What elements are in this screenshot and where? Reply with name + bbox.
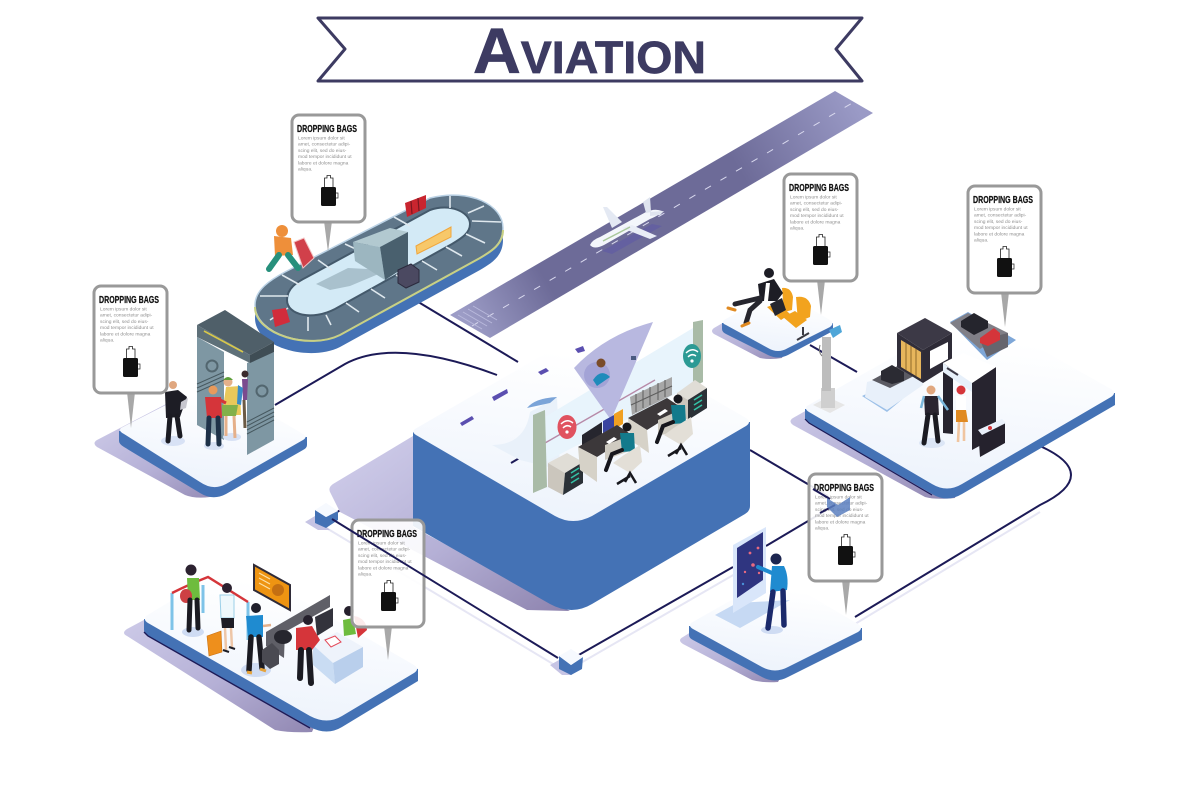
small desk — [978, 419, 1006, 457]
callout: kiosk: amet, consectetur adipi- — [815, 501, 868, 507]
callout: kiosk: Lorem ipsum dolor sit — [815, 494, 862, 500]
callout: security: DROPPING BAGS — [973, 195, 1033, 206]
person: back purple — [242, 370, 248, 428]
person: blue shirt man — [241, 603, 271, 677]
hologram — [574, 322, 653, 420]
platform: seating — [712, 268, 833, 359]
person: red jacket man — [296, 615, 320, 683]
callout: security: labore et dolore magna — [974, 231, 1025, 237]
kiosk screen — [715, 527, 790, 628]
callout: seating — [784, 174, 857, 315]
server right — [677, 380, 707, 420]
wifi icon teal — [683, 344, 701, 368]
wall display — [254, 565, 290, 610]
platform: bottom check-in — [124, 564, 418, 732]
callout: check-in: labore et dolore magna — [358, 565, 409, 571]
icon: suitcase — [813, 234, 830, 265]
platform: left gate — [94, 310, 307, 498]
person: suit — [161, 381, 188, 446]
callout: seating: mod tempor incididunt ut — [790, 213, 844, 219]
callout: conveyor: mod tempor incididunt ut — [298, 154, 352, 160]
person: kiosk user — [758, 554, 788, 634]
bag: red small — [272, 308, 290, 327]
callout: seating: amet, consectetur adipi- — [790, 201, 843, 207]
callout: conveyor: amet, consectetur adipi- — [298, 142, 351, 148]
metal detector — [943, 353, 996, 450]
server left — [548, 453, 583, 495]
title: AVIATION — [473, 15, 706, 87]
callout: conveyor: labore et dolore magna — [298, 160, 349, 166]
person: green top woman — [180, 564, 204, 637]
person: seated man — [728, 268, 786, 326]
connector lines — [275, 300, 1071, 668]
bag: red top — [405, 195, 426, 217]
curved sheet — [492, 397, 560, 470]
callout: security: mod tempor incididunt ut — [974, 225, 1028, 231]
stanchions and rope — [172, 577, 248, 640]
platform: right security — [790, 312, 1115, 499]
x-ray scanner — [897, 318, 952, 383]
callout: security: aliqua. — [974, 238, 988, 244]
icon: suitcase — [123, 346, 140, 377]
icon: suitcase — [838, 534, 855, 565]
bag: dark — [398, 264, 419, 288]
person: white top woman — [220, 583, 235, 652]
camera pole — [813, 325, 845, 413]
callout: kiosk: mod tempor incididunt ut — [815, 513, 869, 519]
icon: suitcase — [321, 176, 338, 206]
callout: conveyor: Lorem ipsum dolor sit — [298, 136, 345, 142]
callout: check-in: mod tempor incididunt ut — [358, 559, 412, 565]
person: green hat — [222, 377, 243, 441]
sign — [416, 227, 451, 254]
callout: conveyor: aliqua. — [298, 166, 312, 172]
callout: seating: scing elit, sed do eius- — [790, 207, 839, 213]
callout: check-in: Lorem ipsum dolor sit — [358, 540, 405, 546]
callout: left gate: scing elit, sed do eius- — [100, 319, 149, 325]
callout: kiosk: scing elit, sed do eius- — [815, 507, 864, 513]
title banner — [318, 15, 862, 87]
callout: seating: aliqua. — [790, 226, 804, 232]
callout: check-in: scing elit, sed do eius- — [358, 553, 407, 559]
callout: kiosk: DROPPING BAGS — [814, 483, 874, 494]
desk one — [578, 425, 632, 482]
person: red cap woman — [956, 386, 968, 442]
operator two — [657, 394, 693, 456]
baggage belt — [862, 363, 935, 412]
callout: left gate: Lorem ipsum dolor sit — [100, 306, 147, 312]
desk two — [628, 398, 682, 453]
central control block — [413, 320, 750, 610]
roof marks — [460, 346, 585, 426]
junction: bottom — [550, 649, 583, 675]
overlay line through check-in callout — [332, 519, 558, 658]
operator one — [606, 422, 642, 484]
callout: seating: DROPPING BAGS — [789, 183, 849, 194]
seats — [767, 288, 811, 340]
platform: conveyor — [255, 195, 503, 353]
callout: kiosk: labore et dolore magna — [815, 519, 866, 525]
runway — [450, 91, 873, 338]
baggage table — [950, 312, 1016, 360]
airplane — [590, 197, 664, 254]
callout: check-in — [352, 520, 424, 660]
check-in desk — [313, 608, 363, 684]
person: attendant — [343, 606, 367, 638]
callout: security: Lorem ipsum dolor sit — [974, 206, 1021, 212]
callout: left gate: labore et dolore magna — [100, 331, 151, 337]
wifi icon red — [558, 415, 576, 439]
luggage belt — [262, 595, 330, 669]
callout: check-in: DROPPING BAGS — [357, 529, 417, 540]
callout: left gate: amet, consectetur adipi- — [100, 313, 153, 319]
callout: conveyor: scing elit, sed do eius- — [298, 148, 347, 154]
callout: kiosk: aliqua. — [815, 526, 829, 532]
central block shadow — [329, 436, 570, 611]
callout: conveyor — [292, 115, 365, 252]
callout: left gate: DROPPING BAGS — [99, 295, 159, 306]
icon: suitcase — [381, 580, 398, 611]
monitors — [582, 377, 672, 448]
overlay chevron through kiosk callout — [813, 489, 850, 517]
security gate — [197, 310, 274, 455]
orange suitcase — [207, 631, 222, 656]
callout: seating: Lorem ipsum dolor sit — [790, 194, 837, 200]
callout: check-in: amet, consectetur adipi- — [358, 547, 411, 553]
callout: security: amet, consectetur adipi- — [974, 213, 1027, 219]
scanner box — [353, 228, 408, 280]
person: guard — [919, 386, 948, 448]
callout: kiosk — [809, 474, 882, 615]
junction: left — [305, 503, 338, 530]
platform: kiosk — [680, 527, 862, 682]
person: red jacket — [204, 386, 226, 450]
callout: security: scing elit, sed do eius- — [974, 219, 1023, 225]
worker with cart — [269, 225, 314, 269]
callout: security — [968, 186, 1041, 327]
icon: suitcase — [997, 246, 1014, 277]
callout: seating: labore et dolore magna — [790, 219, 841, 225]
callout: conveyor: DROPPING BAGS — [297, 124, 357, 135]
glass wall — [545, 328, 693, 462]
callout: left gate: aliqua. — [100, 338, 114, 344]
wall pillars — [533, 320, 703, 493]
callout: left gate — [94, 286, 167, 428]
callout: check-in: aliqua. — [358, 572, 372, 578]
callout: left gate: mod tempor incididunt ut — [100, 325, 154, 331]
